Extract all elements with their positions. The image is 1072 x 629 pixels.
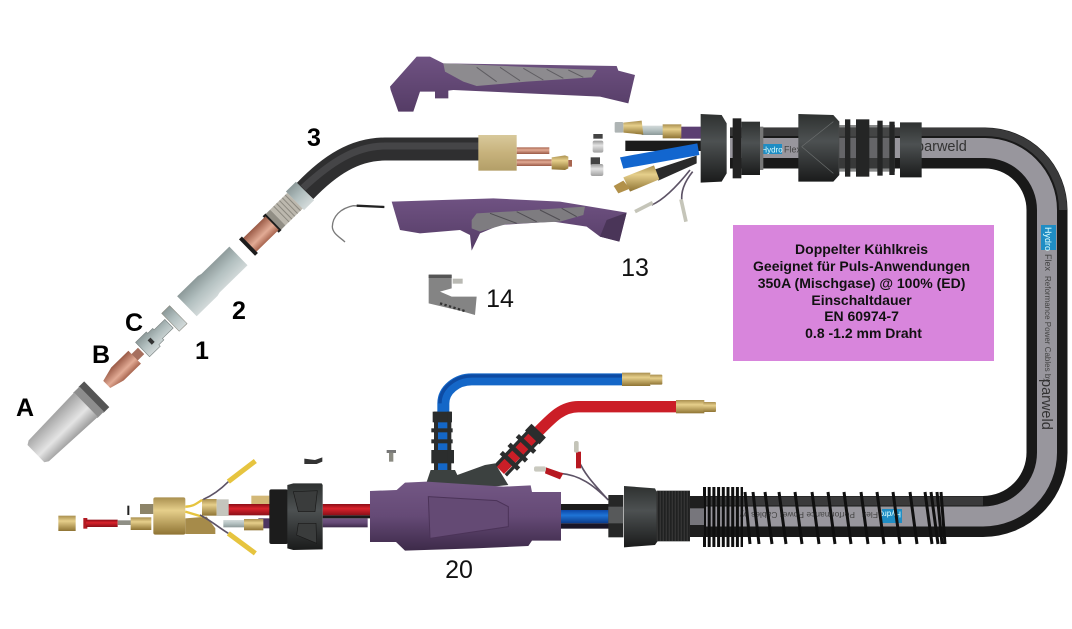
purple handle body <box>370 482 561 551</box>
info text: Doppelter Kühlkreis <box>795 241 928 257</box>
ribbed sleeve <box>838 119 895 177</box>
junction <box>426 463 508 488</box>
collar and gas diffuser <box>238 182 314 257</box>
label 13: 13 <box>621 254 649 282</box>
end cap <box>58 516 76 531</box>
red liner <box>83 518 131 529</box>
top strain relief and nuts <box>701 114 922 183</box>
red hose <box>500 400 716 470</box>
rear tubes <box>561 504 609 529</box>
small fastener <box>304 457 322 464</box>
label: hose brand vertical: Reformance Power Cables by <box>1043 276 1052 382</box>
info text: 0.8 -1.2 mm Draht <box>805 325 922 341</box>
torch-side cable bundle <box>614 121 703 222</box>
part labels <box>16 124 649 584</box>
label: hose brand top: Flex <box>784 144 802 154</box>
small screw <box>387 450 396 462</box>
cable: main hose assembly <box>640 132 1063 523</box>
info text: 350A (Mischgase) @ 100% (ED) <box>758 275 965 291</box>
label: hose brand bottom <box>739 509 902 523</box>
label: hose brand vertical: Hydro <box>1043 227 1053 251</box>
brass body <box>131 496 269 535</box>
rear connector with wires <box>534 441 690 547</box>
brass connector block with copper tubes <box>478 135 572 171</box>
dark tube and brass fitting <box>614 156 697 193</box>
info text: Einschaltdauer <box>811 292 912 308</box>
label: hose brand bottom: Flex <box>861 510 878 520</box>
info text: EN 60974-7 <box>824 308 899 324</box>
blue hose <box>440 373 662 470</box>
label 3: 3 <box>307 124 321 152</box>
grip <box>472 207 585 232</box>
red strain relief <box>492 422 547 479</box>
threaded collar <box>733 118 762 178</box>
label A: A <box>16 394 34 422</box>
label: hose brand top: Hydro <box>761 146 783 154</box>
small pin <box>127 506 129 515</box>
grip <box>443 63 597 86</box>
label: hose brand top <box>761 139 967 155</box>
part A: gas nozzle <box>23 381 109 466</box>
torch neck with tip parts <box>23 146 480 466</box>
neck tube <box>303 146 480 191</box>
front nut <box>900 122 922 177</box>
label 14: 14 <box>486 285 514 313</box>
rear nut <box>701 114 727 183</box>
hose gap with stripe <box>690 496 704 537</box>
yellow terminals <box>200 461 255 553</box>
part B: contact tip <box>100 344 147 391</box>
label: hose brand vertical: Flex <box>1043 254 1053 272</box>
blue tube <box>620 143 699 169</box>
bottom left torch connector <box>58 457 371 553</box>
handle recess <box>428 497 508 538</box>
coolant hoses and handle <box>370 373 716 551</box>
red and purple conduits <box>227 504 371 528</box>
spring guard on cable <box>703 492 945 544</box>
label: hose brand bottom: Performance Power Cables by <box>739 510 855 520</box>
top handle shell <box>390 57 635 112</box>
label B: B <box>92 341 110 369</box>
part 2: contact tube sleeve <box>177 246 248 316</box>
curved wire <box>332 206 384 242</box>
black tube <box>625 141 702 151</box>
gas tube and fitting <box>615 121 703 139</box>
label C: C <box>125 309 143 337</box>
part 1: washer <box>162 306 187 331</box>
large black nut <box>269 483 323 550</box>
label 1: 1 <box>195 337 209 365</box>
label 20: 20 <box>445 556 473 584</box>
bottom handle shell <box>392 198 627 251</box>
blue strain relief <box>431 412 454 470</box>
label: hose brand vertical: parweld <box>1038 379 1054 430</box>
info text: Geeignet für Puls-Anwendungen <box>753 258 970 274</box>
part C: tip holder <box>136 317 176 357</box>
retaining clips <box>591 134 603 176</box>
large nut <box>798 114 839 182</box>
label: hose brand bottom: Hydro <box>879 510 901 518</box>
small trigger part 14 <box>429 274 477 315</box>
label 2: 2 <box>232 297 246 325</box>
signal wires <box>635 170 693 222</box>
label: hose brand vertical <box>1038 225 1056 430</box>
info panel <box>733 225 994 361</box>
label: hose brand top: parweld <box>916 139 967 155</box>
